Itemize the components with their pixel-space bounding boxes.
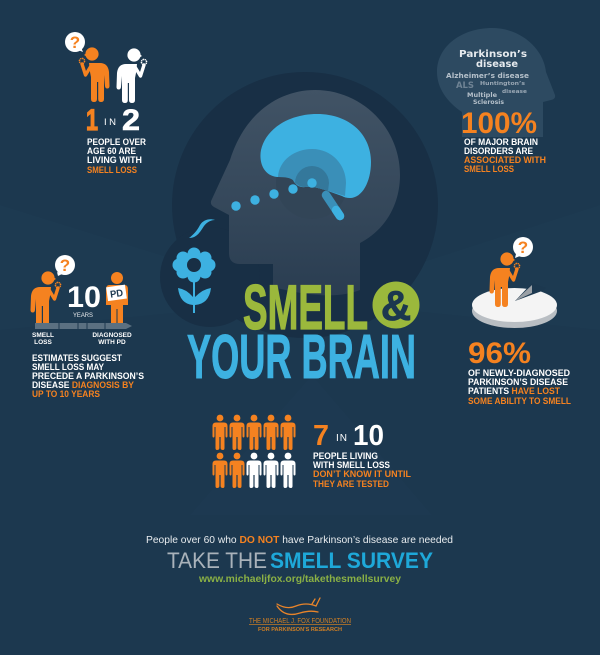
icon: question bubble: ? [518,238,528,257]
icon: question bubble: ? [60,256,70,275]
description: THEY ARE TESTED [313,479,389,490]
title: SMELL [243,273,368,343]
icon: question bubble [513,237,533,258]
statistic [313,420,384,452]
panel: 10 years [30,255,144,400]
disorder word cloud: ALS [456,81,474,91]
icon: orange person [79,47,110,102]
description [32,353,144,400]
statistic: IN [104,117,116,128]
description: ESTIMATES SUGGEST [32,353,122,364]
description: WITH SMELL LOSS [313,460,390,471]
url: www.michaeljfox.org/takethesmellsurvey [198,573,401,585]
disorder word cloud: Sclerosis [473,99,504,106]
description: SMELL LOSS MAY [32,362,105,373]
timeline labels: LOSS [34,339,53,346]
description: ASSOCIATED WITH [464,155,546,166]
description [468,368,571,407]
icon: fox [277,598,320,614]
head silhouette [211,90,400,295]
survey heading [167,548,433,573]
icon: question bubble [65,32,85,52]
description: PARKINSON’S DISEASE [468,377,568,388]
panel: 96% [468,237,571,407]
intro line: People over 60 who DO NOT have Parkinson’s disease are needed [146,534,453,546]
panel: 1 in 2 [65,32,147,176]
statistic: 2 [122,104,140,137]
description: PRECEDE A PARKINSON’S [32,371,144,382]
disorder word cloud: Huntington’s [480,81,526,87]
description: SOME ABILITY TO SMELL [468,396,571,407]
survey heading: SMELL SURVEY [270,548,433,573]
ampersand badge [372,282,420,329]
description: LIVING WITH [87,155,142,166]
logo: Michael J. Fox Foundation [249,598,351,633]
disorder word cloud: Alzheimer’s disease [446,72,529,80]
icon: white person [116,48,147,103]
inner brain ring [278,149,346,196]
icon: question bubble [55,255,75,276]
survey heading: TAKE THE [167,548,267,573]
faint ring [276,147,348,219]
description [464,137,546,175]
brain [260,114,371,198]
description: DISORDERS ARE [464,146,533,157]
disorder word cloud: Multiple [467,92,497,99]
statistic: 100% [461,107,537,140]
foundation tagline: FOR PARKINSON’S RESEARCH [258,627,342,633]
olfactory stem [326,195,340,216]
icon: person smelling [30,271,61,326]
icon: person with PD sign: PD [110,288,124,301]
description: UP TO 10 YEARS [32,389,100,400]
timeline arrow [35,323,132,329]
description: OF NEWLY-DIAGNOSED [468,368,570,379]
ampersand badge: & [381,282,411,329]
dark circle behind flower [160,227,260,327]
statistic: 96% [468,337,531,370]
description: SMELL LOSS [464,164,514,175]
statistic: 1 [86,104,98,137]
number 10: 10 [67,281,101,314]
disorder word cloud [446,49,529,106]
title [187,273,420,392]
icon: person with PD sign [106,272,128,327]
description [87,137,146,176]
call to action [146,534,453,585]
description: DISEASE DIAGNOSIS BY [32,380,135,391]
timeline labels: DIAGNOSED [92,332,132,339]
description: PEOPLE LIVING [313,451,378,462]
timeline labels: SMELL [32,332,54,339]
title: YOUR BRAIN [187,323,416,392]
icon: ten people [212,415,296,488]
description [313,451,411,490]
disorder word cloud: disease [502,89,527,95]
foundation name: THE MICHAEL J. FOX FOUNDATION [249,618,351,625]
timeline labels [32,332,132,346]
timeline labels: WITH PD [98,339,126,346]
dark halo behind head [172,72,438,338]
icon: question bubble: ? [70,33,80,52]
statistic: 10 [353,420,384,452]
head silhouette with disorders [437,28,555,137]
central head illustration [160,72,438,338]
statistic: 7 [313,420,329,452]
panel: 100% [437,28,555,175]
icon: flower [172,219,216,313]
inner brain core [295,166,329,191]
panel: 7 in 10 [212,415,411,490]
disorder word cloud: Parkinson’s [459,49,527,60]
scent dots [231,178,317,211]
scent squiggle [189,219,215,238]
description: DON’T KNOW IT UNTIL [313,469,411,480]
years label: YEARS [73,312,94,319]
pie chart [472,283,557,328]
description: PATIENTS HAVE LOST [468,386,560,397]
disorder word cloud: disease [476,59,518,70]
statistic: IN [336,433,347,444]
description: AGE 60 ARE [87,146,136,157]
description: SMELL LOSS [87,165,137,176]
description: PEOPLE OVER [87,137,146,148]
statistic [86,104,140,137]
icon: person on pie [490,252,520,307]
description: OF MAJOR BRAIN [464,137,538,148]
